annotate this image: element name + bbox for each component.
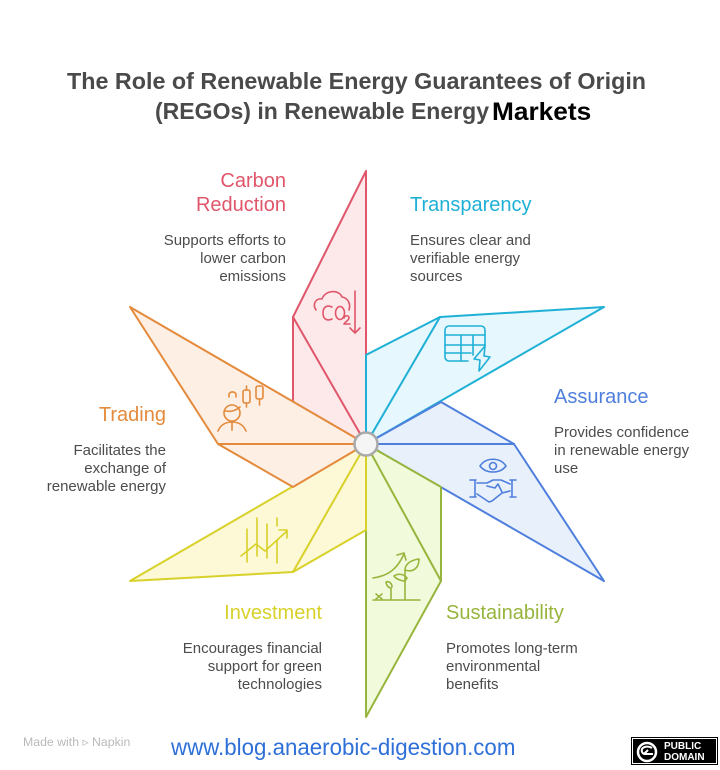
text: investment description: support for green <box>208 658 322 675</box>
text: trading description <box>47 442 166 495</box>
heading: Trading: Trading <box>99 404 166 426</box>
text: transparency description: sources <box>410 268 463 285</box>
icon: plants and arrow <box>373 553 420 600</box>
panel: trading blade <box>130 307 366 487</box>
heading: Assurance: Assurance <box>554 386 648 408</box>
panel: transparency blade <box>366 307 604 444</box>
text: sustainability description: benefits <box>446 676 499 693</box>
text: trading description: renewable energy <box>47 478 166 495</box>
panel: investment blade <box>130 444 366 581</box>
text: carbon reduction description <box>164 232 286 285</box>
icon: table with lightning <box>445 326 490 371</box>
text: trading description: Facilitates the <box>73 442 166 459</box>
text: assurance description <box>554 424 690 477</box>
text: sustainability description: environmental <box>446 658 540 675</box>
icon: rising chart bars <box>241 518 287 563</box>
credit: made with Napkin: Made with ▹ Napkin <box>23 735 130 749</box>
text: investment description: technologies <box>238 676 322 693</box>
icon: trader with candlesticks <box>218 386 263 431</box>
public domain badge: PUBLIC <box>664 741 701 752</box>
text: carbon reduction description: lower carbon <box>200 250 286 267</box>
heading: Transparency: Transparency <box>410 194 532 216</box>
public domain badge <box>631 737 718 765</box>
title: The Role of Renewable Energy Guarantees of Origin <box>67 68 646 94</box>
text: trading description: exchange of <box>84 460 166 477</box>
panel: carbon reduction blade <box>293 171 366 444</box>
text: investment description <box>183 640 322 693</box>
panel: assurance blade <box>366 402 604 581</box>
title: (REGOs) in Renewable Energy <box>155 98 489 124</box>
title <box>67 68 646 126</box>
text: carbon reduction description: Supports efforts to <box>164 232 286 249</box>
heading: Carbon Reduction: Reduction <box>196 194 286 216</box>
hub circle <box>354 432 378 456</box>
website link text: www.blog.anaerobic-digestion.com <box>171 734 515 760</box>
text: transparency description: verifiable energy <box>410 250 520 267</box>
text: carbon reduction description: emissions <box>219 268 286 285</box>
panel: sustainability blade <box>366 444 441 717</box>
heading: Carbon Reduction: Carbon <box>220 170 286 192</box>
text: assurance description: Provides confidence <box>554 424 689 441</box>
public domain badge: DOMAIN <box>664 752 705 763</box>
icon: CO2 cloud with down arrow <box>314 291 360 333</box>
title: Markets <box>492 98 591 126</box>
heading: Carbon Reduction <box>196 170 286 216</box>
text: sustainability description <box>446 640 578 693</box>
icon: eye and handshake <box>470 459 516 502</box>
text: investment description: Encourages financial <box>183 640 322 657</box>
text: sustainability description: Promotes long-term <box>446 640 578 657</box>
text: assurance description: use <box>554 460 578 477</box>
text: assurance description: in renewable energy <box>554 442 689 459</box>
heading: Investment: Investment <box>224 602 322 624</box>
text: transparency description: Ensures clear and <box>410 232 531 249</box>
heading: Sustainability: Sustainability <box>446 602 564 624</box>
text: transparency description <box>410 232 531 285</box>
